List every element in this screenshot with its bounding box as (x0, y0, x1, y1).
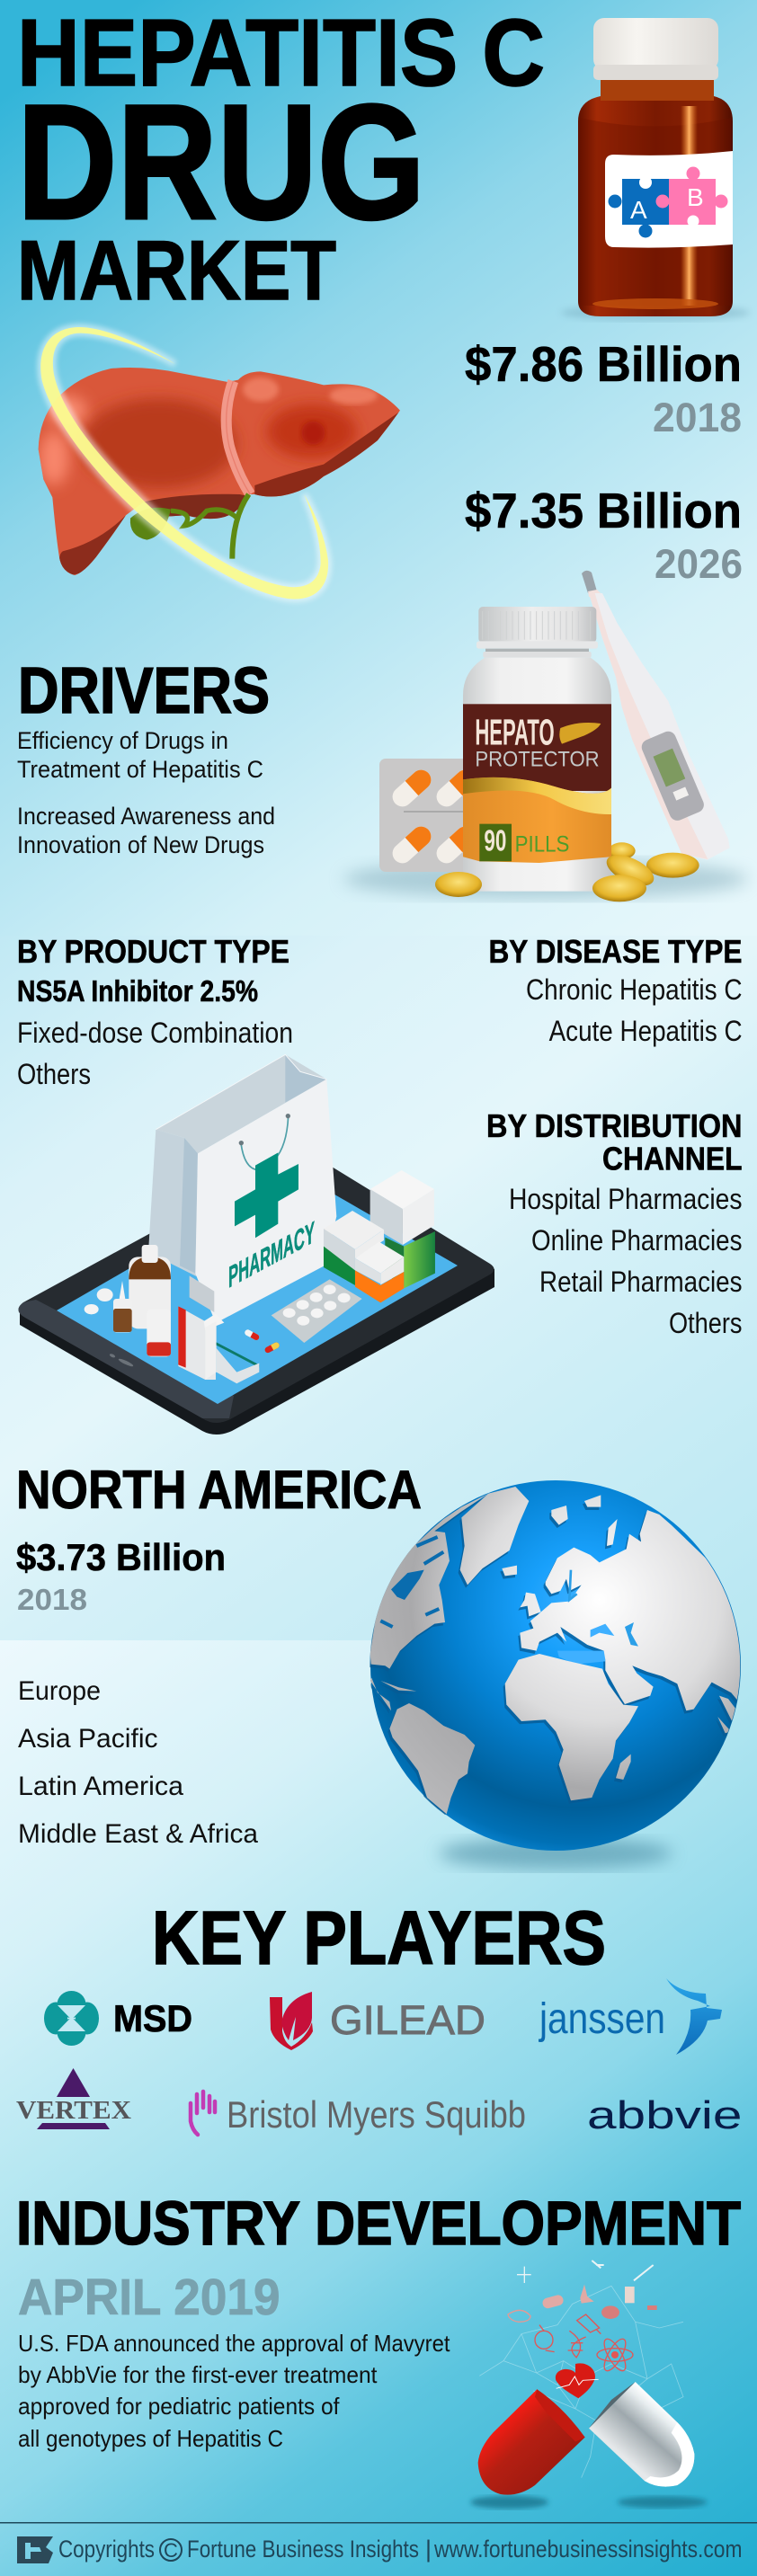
north america stat: $3.73 Billion (16, 1536, 226, 1578)
logo: Gilead (270, 1992, 485, 2050)
logo: MSD: MSD (113, 1997, 192, 2039)
drivers text (17, 655, 275, 858)
icon: hepato protector bottle, blister, pills, thermometer: 90 (484, 825, 506, 858)
stat: 2018 market value: 2018 (653, 395, 742, 440)
logo: Vertex (16, 2068, 131, 2129)
logo: Gilead: GILEAD (330, 1997, 485, 2043)
stat: 2026 market value (465, 483, 743, 587)
by product type list: Others (17, 1058, 91, 1090)
by disease type list (489, 933, 743, 1047)
footer (0, 2522, 757, 2563)
north america stat: 2018 (17, 1583, 87, 1616)
by product type list: NS5A Inhibitor 2.5% (17, 974, 258, 1008)
title: HEPATITIS C (17, 0, 545, 106)
other regions list (18, 1676, 258, 1849)
stat: 2026 market value: $7.35 Billion (465, 483, 742, 538)
footer: Copyrights (58, 2536, 155, 2563)
icon: hepato protector bottle, blister, pills, thermometer (343, 571, 748, 902)
other regions list: Middle East & Africa (18, 1819, 258, 1849)
logo: Janssen (538, 1978, 722, 2055)
icon: globe (369, 1480, 749, 1870)
icon: hepato protector bottle, blister, pills, thermometer: HEPATO (475, 711, 555, 752)
logo: Vertex: VERTEX (16, 2097, 131, 2125)
key players heading: KEY PLAYERS (152, 1896, 606, 1980)
stat: 2018 market value: $7.86 Billion (465, 336, 742, 392)
by product type list: Fixed-dose Combination (17, 1017, 293, 1049)
logo: MSD (44, 1991, 192, 2046)
illustration: pharmacy on tablet: PHARMACY (228, 1215, 315, 1294)
drivers text: Efficiency of Drugs in (17, 727, 228, 754)
icon: hepato protector bottle, blister, pills, thermometer: PILLS (515, 831, 569, 857)
title: MARKET (17, 223, 336, 317)
icon: medicine bottle with puzzle label: B (687, 183, 704, 211)
drivers text: Treatment of Hepatitis C (17, 756, 263, 783)
by product type list: BY PRODUCT TYPE (17, 933, 289, 970)
illustration: pharmacy on tablet (18, 1054, 494, 1435)
other regions list: Asia Pacific (18, 1724, 158, 1754)
industry development text: APRIL 2019 (18, 2269, 281, 2326)
footer: C (164, 2539, 178, 2562)
icon: hepato protector bottle, blister, pills, thermometer: PROTECTOR (475, 748, 600, 772)
by product type list (17, 933, 293, 1090)
icon: liver with halo (39, 327, 402, 599)
icon: medicine bottle with puzzle label: A (630, 196, 647, 224)
drivers text: Innovation of New Drugs (17, 831, 264, 858)
logo: AbbVie: abbvie (587, 2093, 743, 2137)
stat: 2018 market value (465, 336, 742, 440)
title: DRUG (17, 70, 425, 253)
other regions list: Europe (18, 1676, 101, 1706)
industry development text (18, 2269, 450, 2452)
other regions list: Latin America (18, 1772, 183, 1801)
icon: open capsule with medical icons (470, 2261, 708, 2509)
logo: Janssen: janssen (538, 1995, 665, 2043)
by distribution channel list (486, 1107, 743, 1339)
stat: 2026 market value: 2026 (655, 541, 743, 587)
title (17, 0, 545, 317)
footer: Fortune Business Insights (187, 2536, 419, 2563)
footer: | (425, 2536, 432, 2563)
icon: medicine bottle with puzzle label (561, 18, 750, 321)
industry development text: approved for pediatric patients of (18, 2393, 340, 2420)
industry development text: by AbbVie for the first-ever treatment (18, 2361, 378, 2388)
north america stat: NORTH AMERICA (16, 1460, 422, 1520)
by distribution channel list: Others (669, 1307, 743, 1339)
industry development text: U.S. FDA announced the approval of Mavyret (18, 2330, 450, 2357)
logo: Bristol Myers Squibb: Bristol Myers Squibb (227, 2093, 526, 2136)
north america stat (16, 1460, 422, 1616)
drivers text: Increased Awareness and (17, 803, 275, 830)
industry development text: all genotypes of Hepatitis C (18, 2425, 283, 2452)
drivers text: DRIVERS (18, 655, 270, 727)
by distribution channel list: CHANNEL (602, 1141, 743, 1177)
